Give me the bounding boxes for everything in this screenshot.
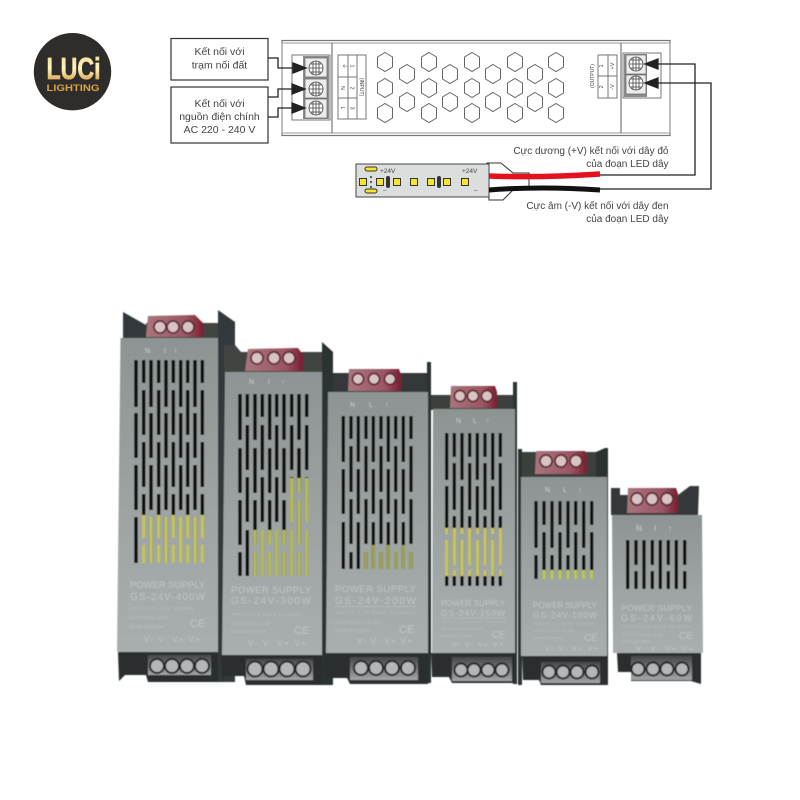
label box: earth connection: trạm nối đất <box>192 60 247 72</box>
power supply 150W: N <box>456 418 461 425</box>
label box: mains input: AC 220 - 240 V <box>184 124 255 136</box>
red wire <box>489 174 600 177</box>
spec text: MADE IN CHINA <box>129 624 165 630</box>
spec text: V- V- V+ V+ <box>144 635 200 644</box>
power supply 150W <box>431 382 517 684</box>
spec text: POWER SUPPLY <box>533 601 598 610</box>
power supply 200W: N <box>350 402 355 409</box>
input terminal <box>348 369 401 391</box>
arrows: output wires <box>600 59 711 189</box>
power supply 150W: ↑ <box>486 418 490 425</box>
spec text <box>441 599 506 649</box>
output terminal <box>246 659 313 680</box>
spec text: V- V- V+ V+ <box>248 639 306 648</box>
power supply outline <box>282 40 670 136</box>
output table: 1 <box>599 64 605 68</box>
vent slots <box>136 360 202 563</box>
power supply 200W <box>322 342 431 685</box>
input table: ⏚ <box>341 63 348 69</box>
caption: positive wire <box>513 145 669 170</box>
spec text: INPUT:110-264V 50/60Hz <box>441 619 505 624</box>
spec text: GS-24V-150W <box>441 608 505 618</box>
wiring diagram <box>171 38 711 225</box>
caption: negative wire: Cực âm (-V) kết nối với dây đen <box>526 200 668 212</box>
logo: LUCI Lighting <box>34 33 111 110</box>
output table: +V <box>610 62 616 69</box>
spec text: POWER SUPPLY <box>621 603 692 613</box>
strip connector <box>487 163 529 200</box>
spec text: V- V- V+ V+ <box>357 637 412 646</box>
left terminal block <box>292 55 330 120</box>
label box: mains input: nguồn điện chính <box>179 111 260 123</box>
input terminal <box>245 348 303 371</box>
spec text: MADE IN CHINA <box>231 629 267 635</box>
LED strip: – <box>383 188 387 194</box>
spec text: INPUT:175-264V 50/60Hz <box>129 606 195 612</box>
spec text: CE <box>399 624 414 636</box>
spec text: GS-24V-300W <box>231 596 312 607</box>
input table: N <box>339 86 345 90</box>
product photo: six power supplies <box>117 310 703 685</box>
spec text <box>335 584 417 646</box>
spec text: MADE IN CHINA <box>621 639 651 644</box>
LED strip: – <box>474 188 478 194</box>
spec text: INPUT:110-264V 50/60Hz <box>621 624 691 629</box>
power supply 400W <box>117 310 235 682</box>
label box: earth connection <box>171 38 268 80</box>
spec text <box>621 603 694 653</box>
input terminal <box>535 451 587 474</box>
spec text: INPUT:175-264V 50/60Hz <box>231 612 302 618</box>
power supply 200W: ↑ <box>385 402 388 409</box>
vent slots <box>240 394 307 576</box>
output terminal <box>452 657 512 681</box>
power supply 100W: ↑ <box>578 487 582 494</box>
output terminal <box>148 655 211 675</box>
spec text: GS-24V-100W <box>533 610 597 620</box>
spec text: GS-24V-400W <box>130 592 206 603</box>
power supply 100W: L <box>563 487 567 494</box>
spec text: GS-24V-60W <box>621 613 692 623</box>
power supply 60W: I <box>654 524 656 533</box>
power supply 60W <box>611 486 703 684</box>
spec text <box>231 585 312 648</box>
power supply 60W: N <box>636 524 642 533</box>
power supply 300W: ↑ <box>281 379 284 386</box>
caption: positive wire: của đoạn LED dây <box>586 158 668 170</box>
spec text: V- V- V+ V+ <box>452 642 503 649</box>
power supply 100W: N <box>545 487 550 494</box>
caption: negative wire <box>526 200 668 225</box>
power supply 300W <box>221 345 322 685</box>
input table: 1 <box>348 64 354 68</box>
spec text: V- V- V+ V+ <box>636 644 694 653</box>
spec text: CE <box>190 618 205 630</box>
spec text: POWER SUPPLY <box>441 599 506 608</box>
spec text: CE <box>679 631 693 642</box>
spec text: INPUT:175-264V 50/60Hz <box>335 610 417 616</box>
spec text: INPUT:110-264V 50/60Hz <box>533 621 596 626</box>
vent slots <box>343 416 411 569</box>
spec text: OUTPUT:24V==12.5A <box>231 621 272 627</box>
input table: 3 <box>348 106 354 110</box>
output table: 2 <box>599 85 605 89</box>
output table <box>590 55 617 98</box>
spec text: V- V- V+ V+ <box>545 646 598 653</box>
spec text: MADE IN CHINA <box>533 635 563 640</box>
input table: (INPUT) <box>358 78 364 96</box>
spec text: CE <box>584 633 598 644</box>
logo: LUCI Lighting: LUCi <box>46 51 100 86</box>
spec text <box>533 601 598 653</box>
output terminal <box>541 662 600 683</box>
power supply 300W: N <box>249 379 254 386</box>
spec text: OUTPUT:24V==8.33A <box>335 620 381 626</box>
input terminal <box>450 386 497 408</box>
label box: mains input: Kết nối với <box>194 98 245 110</box>
ventilation hexagons <box>378 52 564 122</box>
spec text: MADE IN CHINA <box>335 628 371 634</box>
arrows: input wires <box>268 58 306 117</box>
power supply 300W: I <box>268 379 270 386</box>
label box: earth connection: Kết nối với <box>194 46 245 58</box>
spec text: POWER SUPPLY <box>130 580 206 591</box>
logo: LUCI Lighting: LIGHTING <box>46 83 100 94</box>
spec text: CE <box>294 625 309 637</box>
spec text: OUTPUT:24V==6.25A <box>441 626 483 631</box>
caption: negative wire: của đoạn LED dây <box>586 213 668 225</box>
output terminal <box>350 657 418 680</box>
vent slots <box>536 501 592 579</box>
spec text: POWER SUPPLY <box>231 585 312 596</box>
vent slots <box>447 433 500 586</box>
spec text: POWER SUPPLY <box>335 584 417 595</box>
output table: -V <box>610 84 616 90</box>
power supply 400W: I <box>164 348 166 355</box>
caption: positive wire: Cực dương (+V) kết nối với dây đỏ <box>513 145 669 157</box>
power supply 400W: ↑ <box>174 348 178 355</box>
spec text: GS-24V-200W <box>335 596 417 607</box>
power supply 150W: L <box>473 418 477 425</box>
input terminal <box>146 315 204 337</box>
spec text: OUTPUT:24V==16.6A <box>129 615 170 621</box>
spec text: OUTPUT:24V==4.16A <box>533 628 575 633</box>
black wire <box>489 188 600 190</box>
output table: (OUTPUT) <box>590 64 596 88</box>
spec text: OUTPUT:24V==2.5A <box>621 632 663 637</box>
LED strip: +24V <box>462 168 478 175</box>
LED strip <box>356 163 600 200</box>
input table <box>338 55 366 119</box>
power supply 100W <box>518 448 608 685</box>
LED strip: +24V <box>380 168 396 175</box>
power supply 400W: N <box>145 348 150 355</box>
spec text: CE <box>492 630 506 641</box>
input table: 2 <box>348 86 354 90</box>
power supply 200W: L <box>369 402 373 409</box>
input terminal <box>627 488 678 513</box>
spec text <box>129 580 206 644</box>
input table: L <box>339 106 345 110</box>
label box: mains input <box>171 87 268 143</box>
spec text: MADE IN CHINA <box>441 633 471 638</box>
vent slots <box>628 540 685 589</box>
output terminal <box>631 656 692 680</box>
power supply 60W: ↑ <box>668 524 672 533</box>
right terminal block <box>623 53 661 98</box>
